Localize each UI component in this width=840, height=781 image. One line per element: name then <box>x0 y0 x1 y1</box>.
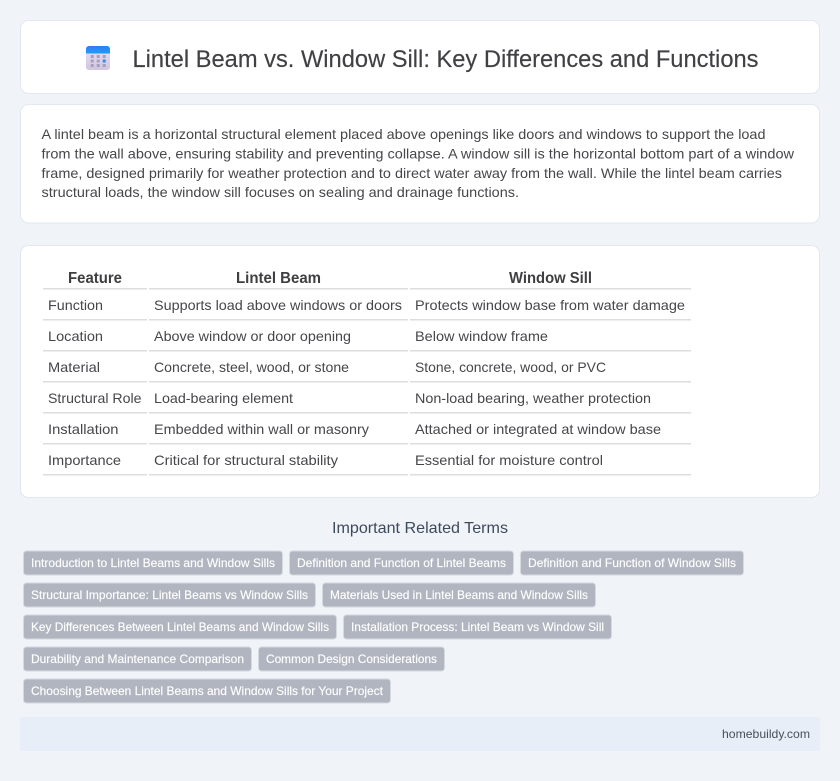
tag <box>24 647 252 671</box>
table row: function: Protects window base from water damage <box>415 297 685 313</box>
tag: Introduction to Lintel Beams and Window Sills <box>31 556 275 570</box>
tag: Structural Importance: Lintel Beams vs Window Sills <box>31 588 308 602</box>
table row: material <box>48 359 606 375</box>
tag <box>24 551 282 575</box>
table header row: Lintel Beam <box>236 270 321 287</box>
tag: Definition and Function of Lintel Beams <box>297 556 506 570</box>
table header row: Feature <box>68 270 122 287</box>
tag <box>322 583 596 607</box>
panel: related term tags <box>24 551 744 703</box>
table row: structural role: Load-bearing element <box>154 390 293 406</box>
table row: location: Location <box>48 328 103 344</box>
panel: comparison table <box>20 246 820 498</box>
tag <box>24 583 316 607</box>
text block: definition paragraph: A lintel beam is a horizontal structural element placed above openings like doors and windows to support the load <box>42 126 765 142</box>
tag <box>24 679 390 703</box>
table row: material: Material <box>48 359 100 375</box>
table row: structural role: Structural Role <box>48 390 142 406</box>
tag <box>258 647 444 671</box>
table row: structural role <box>48 390 651 406</box>
table row: importance <box>48 452 603 468</box>
table header row <box>68 270 592 287</box>
table row: importance: Essential for moisture control <box>415 452 603 468</box>
text block: definition paragraph: frame, designed primarily for weather protection and to direct water away from the wall. While the lintel beam carries <box>42 165 782 181</box>
footer <box>20 717 820 751</box>
tag: Key Differences Between Lintel Beams and Window Sills <box>31 620 329 634</box>
table row: function: Supports load above windows or doors <box>154 297 402 313</box>
tag <box>24 615 336 639</box>
tag: Choosing Between Lintel Beams and Window Sills for Your Project <box>31 684 384 698</box>
table row: material: Stone, concrete, wood, or PVC <box>415 359 606 375</box>
tag <box>290 551 514 575</box>
tag: Materials Used in Lintel Beams and Window Sills <box>330 588 588 602</box>
table row: importance: Importance <box>48 452 121 468</box>
table row: installation: Embedded within wall or masonry <box>154 421 369 437</box>
table row: installation: Attached or integrated at window base <box>415 421 661 437</box>
tag: Installation Process: Lintel Beam vs Window Sill <box>351 620 604 634</box>
table row: installation <box>48 421 661 437</box>
table row: function <box>48 297 685 313</box>
table row: material: Concrete, steel, wood, or stone <box>154 359 349 375</box>
footer source text: homebuildy.com <box>722 727 810 741</box>
icon: calendar <box>86 46 110 70</box>
table row: location: Below window frame <box>415 328 548 344</box>
tag: Durability and Maintenance Comparison <box>31 652 244 666</box>
panel: header <box>20 20 820 94</box>
text block: definition paragraph <box>42 126 795 200</box>
panel: introduction <box>20 104 820 223</box>
table header row: Window Sill <box>509 270 592 287</box>
tag <box>344 615 612 639</box>
tag: Definition and Function of Window Sills <box>528 556 736 570</box>
title: Lintel Beam vs. Window Sill: Key Differences and Functions <box>132 46 758 73</box>
tag <box>520 551 744 575</box>
table row: installation: Installation <box>48 421 118 437</box>
heading: related terms: Important Related Terms <box>332 520 508 537</box>
text block: definition paragraph: structural loads, the window sill focuses on sealing and drainage functions. <box>42 184 519 200</box>
table row: location: Above window or door opening <box>154 328 351 344</box>
table row: importance: Critical for structural stability <box>154 452 338 468</box>
text block: definition paragraph: from the wall above, ensuring stability and preventing collapse. A window sill is the horizontal bottom part of a window <box>42 146 795 162</box>
table row: function: Function <box>48 297 103 313</box>
table row: structural role: Non-load bearing, weather protection <box>415 390 651 406</box>
tag: Common Design Considerations <box>266 652 437 666</box>
table row: location <box>48 328 548 344</box>
